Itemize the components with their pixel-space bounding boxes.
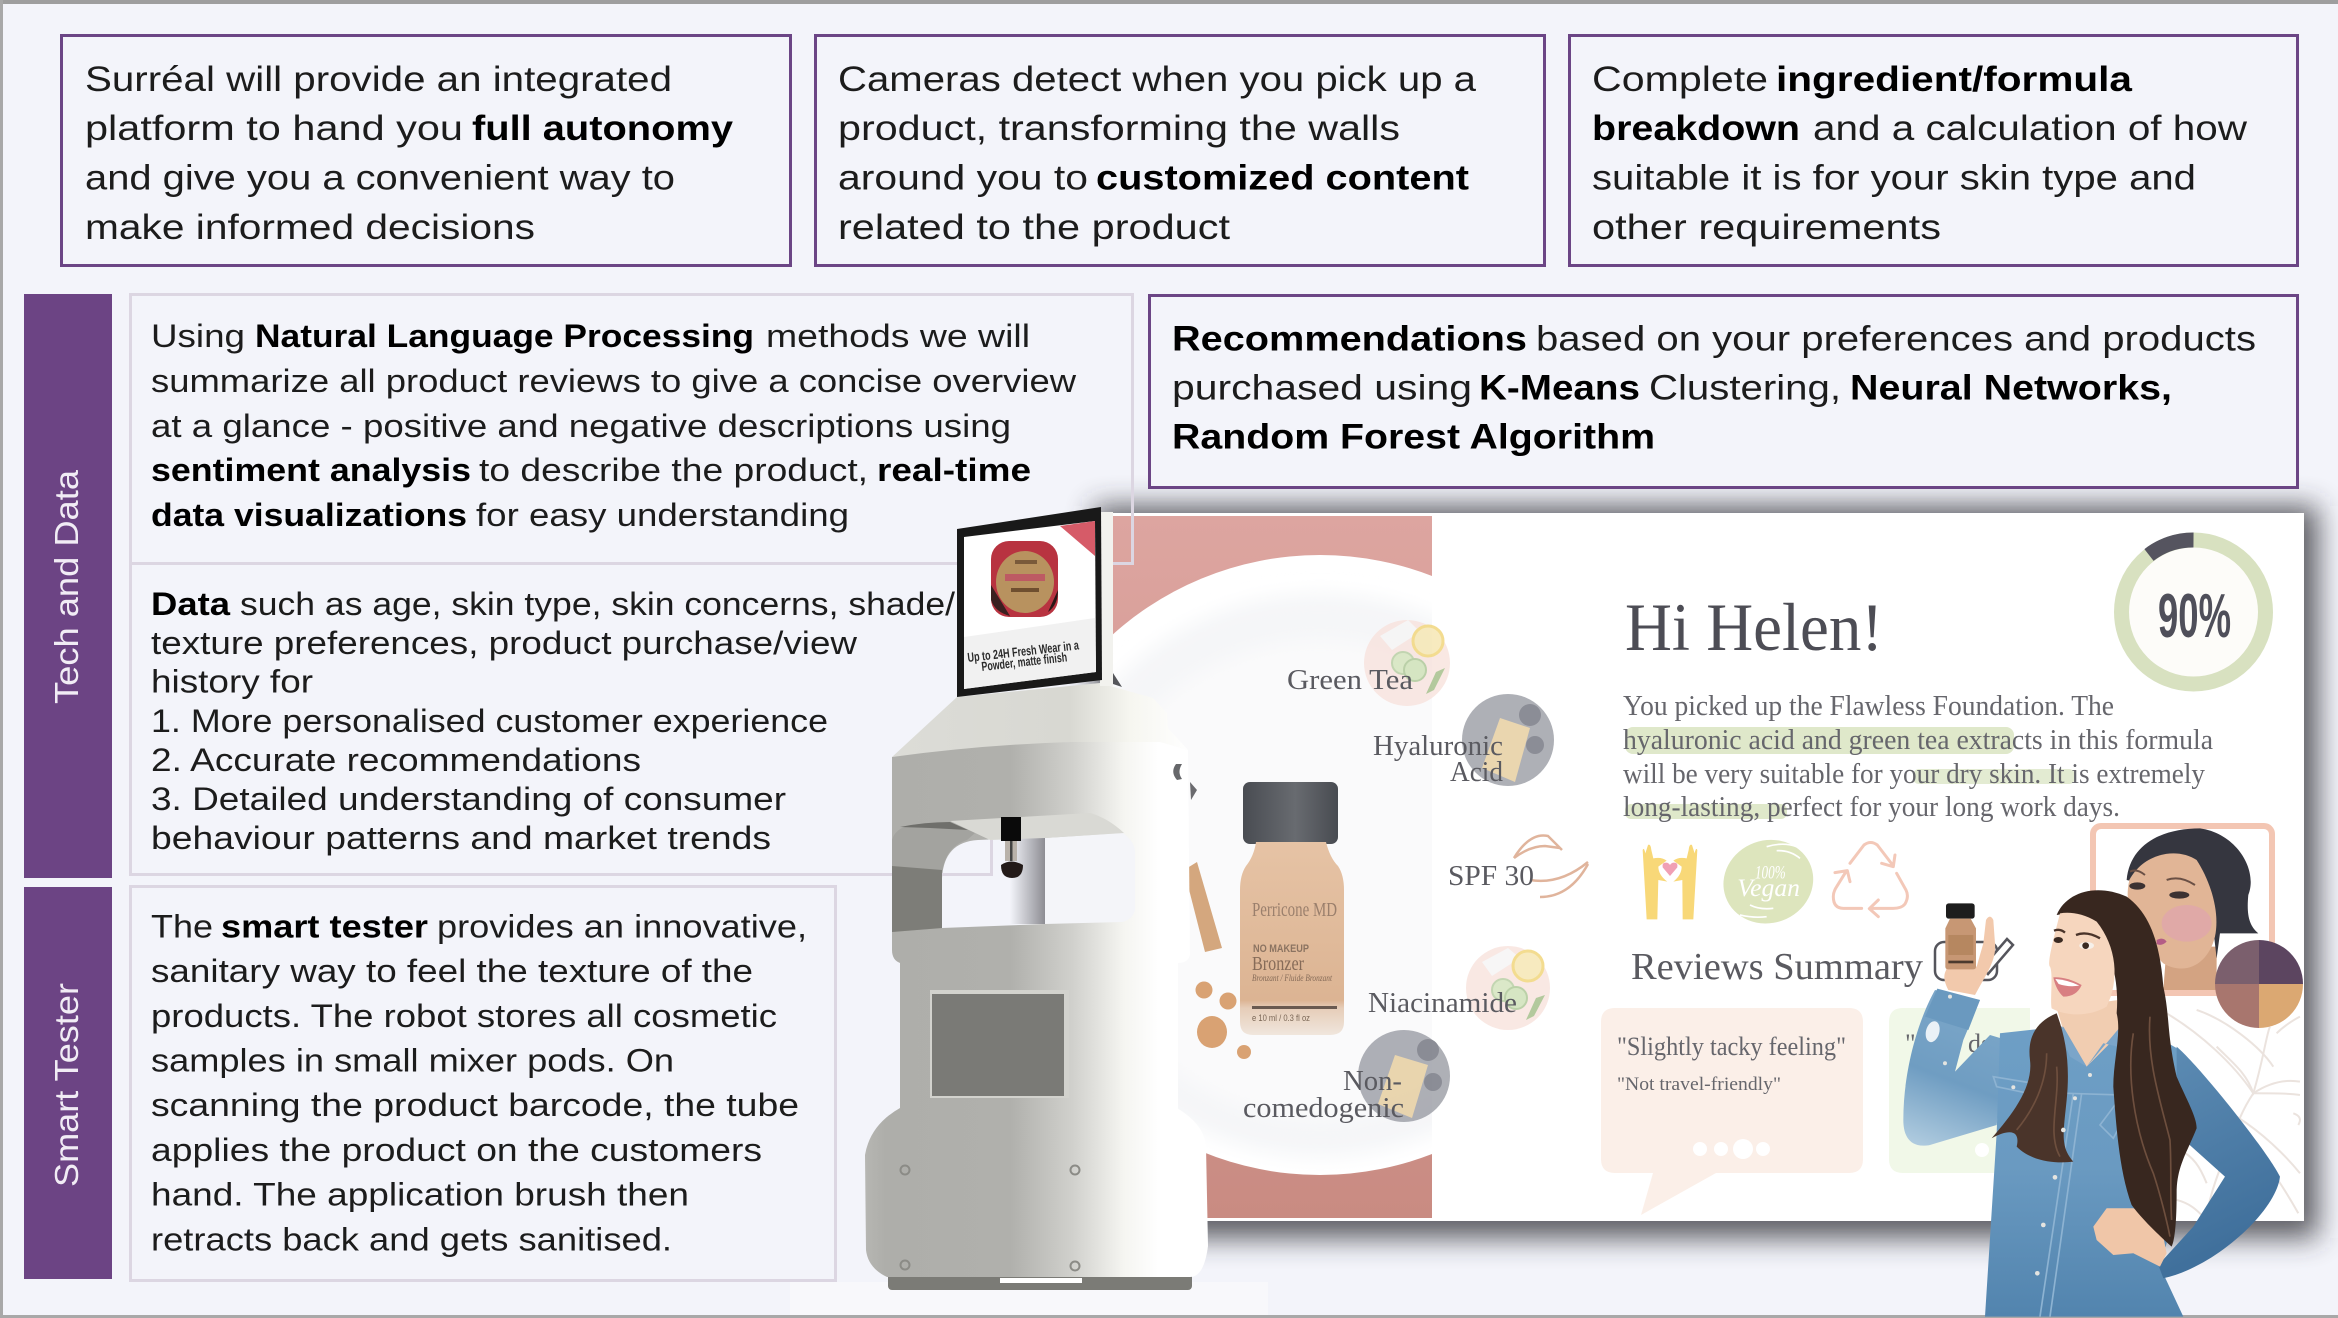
hair main mass: [2057, 890, 2197, 1247]
icon: foundation bottle: Perricone MD: [1252, 899, 1337, 921]
icon: recycle: [1833, 842, 1907, 917]
robot body: [900, 950, 1178, 1115]
hair highlights: [2017, 1017, 2172, 1237]
icon: 100% vegan badge: [1712, 827, 1825, 936]
chart: 90% match ring: [2122, 540, 2266, 684]
top card: ingredient breakdown: suitable it is for your skin type and: [1592, 158, 2196, 198]
face: [2049, 913, 2115, 1014]
review card: tacky feeling: [1601, 1008, 1863, 1215]
right sleeve: [2158, 1047, 2280, 1278]
smart tester text box: hand. The application brush then: [151, 1176, 689, 1212]
top card: ingredient breakdown: and a calculation of how: [1813, 109, 2248, 148]
recommendations card: Clustering,: [1649, 368, 1841, 408]
icon: small foundation bottle: [1945, 903, 1976, 969]
collar: [2060, 1023, 2132, 1067]
icon: application brush: [1001, 817, 1023, 878]
top card: autonomy: Surréal will provide an integrated: [85, 60, 672, 99]
NLP text box: Using: [151, 318, 245, 354]
paragraph with highlights: hyaluronic acid and green tea extracts in this formula: [1623, 725, 2214, 756]
pink background with plate: [1113, 516, 1432, 1218]
ingredient: non-comedogenic: Non-: [1343, 1065, 1402, 1097]
smart tester text box: products. The robot stores all cosmetic: [151, 998, 777, 1034]
data text box: 1. More personalised customer experience: [151, 703, 828, 739]
neck: [2057, 1000, 2123, 1067]
smart tester robot: [790, 507, 1268, 1315]
recommendations card: purchased using: [1172, 368, 1472, 408]
review card: second, mostly hidden: ": [1905, 1029, 1916, 1058]
display screen: [957, 507, 1102, 697]
hand on waist: [2093, 1208, 2167, 1267]
ingredient: non-comedogenic: comedogenic: [1243, 1092, 1404, 1124]
screen bracket: [1100, 512, 1113, 686]
top card: cameras: [816, 36, 1544, 266]
icon: 100% vegan badge: Vegan: [1737, 874, 1800, 902]
recommendations card: [1150, 296, 2298, 488]
smart tester text box: provides an innovative,: [437, 908, 807, 944]
section tab: Smart Tester: Smart Tester: [48, 983, 85, 1187]
review card: second, mostly hidden: [1889, 1008, 2030, 1173]
paragraph with highlights: long-lasting, perfect for your long work days.: [1623, 792, 2120, 823]
recommendations card: based on your preferences and products: [1536, 320, 2256, 358]
icon: hands with heart: [1643, 845, 1697, 919]
facial features: [2053, 930, 2100, 997]
smart tester text box: scanning the product barcode, the tube: [151, 1087, 799, 1123]
product photo on screen: [991, 541, 1058, 617]
data text box: such as age, skin type, skin concerns, shade/: [240, 586, 955, 622]
smart tester text box: applies the product on the customers: [151, 1132, 762, 1168]
paragraph with highlights: [1623, 691, 2214, 823]
hair left strand: [1992, 1013, 2073, 1162]
top card: autonomy: and give you a convenient way to: [85, 158, 675, 198]
reviews heading: Reviews Summary: [1631, 946, 1923, 988]
top card: cameras: Cameras detect when you pick up a: [838, 60, 1477, 99]
ingredient: SPF 30: SPF 30: [1448, 860, 1534, 892]
smart tester text box: The: [151, 908, 213, 944]
raised arm sleeve: [1903, 990, 2007, 1146]
ingredient: non-comedogenic: [1243, 1030, 1450, 1124]
NLP text box: to describe the product,: [479, 452, 868, 488]
ingredient: hyaluronic acid: Acid: [1450, 756, 1503, 788]
woman holding the product: [1903, 890, 2280, 1317]
shirt buttons: [1943, 995, 2092, 1276]
smart tester text box: smart tester: [221, 908, 428, 944]
display screen: Powder, matte finish: [981, 649, 1068, 674]
icon: foundation bottle: NO MAKEUP: [1253, 943, 1309, 955]
ingredient: green tea: [1287, 620, 1450, 706]
review card: tacky feeling: "Slightly tacky feeling": [1617, 1032, 1846, 1061]
icon: foundation drops: [1196, 982, 1251, 1059]
data text box: 3. Detailed understanding of consumer: [151, 781, 786, 817]
review card: tacky feeling: "Not travel-friendly": [1617, 1074, 1781, 1095]
NLP text box: sentiment analysis: [151, 452, 471, 488]
ingredient: SPF 30: [1448, 835, 1588, 897]
NLP text box: summarize all product reviews to give a concise overview: [151, 363, 1077, 399]
recommendations card: K-Means: [1479, 368, 1640, 408]
smart tester text box: samples in small mixer pods. On: [151, 1042, 674, 1078]
ingredient: hyaluronic acid: Hyaluronic: [1373, 730, 1503, 762]
smart tester text box: retracts back and gets sanitised.: [151, 1222, 672, 1258]
data text box: history for: [151, 664, 313, 700]
shirt body: [1985, 1023, 2183, 1317]
data text box: [130, 564, 992, 874]
shirt cuff: [1925, 989, 1980, 1030]
smart tester text box: [130, 886, 836, 1280]
chart: 90% match ring: 90%: [2158, 582, 2231, 651]
smart tester text box: sanitary way to feel the texture of the: [151, 953, 753, 989]
icon: foundation bottle: e 10 ml / 0.3 fl oz: [1252, 1013, 1310, 1023]
icon: write review: [1935, 939, 2013, 980]
eyeshadow palette: [2215, 940, 2303, 1028]
NLP text box: real-time: [877, 452, 1031, 488]
decorative leaf line art: [2167, 1010, 2300, 1217]
ingredient: niacinamide: Niacinamide: [1368, 987, 1517, 1019]
raised hand: [1944, 917, 1995, 995]
recommendations card: Neural Networks,: [1850, 368, 2172, 408]
NLP text box: data visualizations: [151, 497, 467, 533]
data text box: 2. Accurate recommendations: [151, 742, 641, 778]
data text box: texture preferences, product purchase/view: [151, 625, 858, 661]
robot base: [865, 1108, 1208, 1277]
data text box: behaviour patterns and market trends: [151, 820, 771, 856]
robot camera: [1113, 673, 1197, 800]
icon: foundation bottle: Bronzant / Fluide Bronzant: [1252, 973, 1332, 983]
top card: autonomy: make informed decisions: [85, 208, 535, 247]
top card: autonomy: [62, 36, 790, 266]
dispensing opening: [892, 813, 1135, 932]
top card: cameras: customized content: [1096, 158, 1469, 198]
robot screws: [900, 1166, 1080, 1270]
top card: cameras: around you to: [838, 158, 1088, 198]
ingredient: niacinamide: [1368, 946, 1550, 1030]
top card: autonomy: platform to hand you: [85, 109, 463, 148]
top card: cameras: product, transforming the walls: [838, 109, 1400, 148]
section tab: Tech and Data: [24, 294, 112, 878]
icon: 100% vegan badge: 100%: [1755, 862, 1786, 883]
ingredient: green tea: Green Tea: [1287, 664, 1413, 696]
recommendations card: Recommendations: [1172, 320, 1527, 358]
icon: foundation bottle: [1184, 782, 1344, 1035]
NLP text box: [130, 294, 1132, 564]
NLP text box: Natural Language Processing: [255, 318, 754, 354]
NLP text box: for easy understanding: [476, 497, 849, 533]
paragraph with highlights: will be very suitable for your dry skin. It is extremely: [1623, 759, 2205, 790]
robot front panel: [930, 990, 1069, 1098]
robot head: [892, 683, 1188, 757]
slide mock-up panel: personalised product screen: [1010, 506, 2318, 1238]
ingredient: hyaluronic acid: [1373, 694, 1554, 788]
recommendations card: Random Forest Algorithm: [1172, 418, 1655, 456]
robot feet: [888, 1272, 1192, 1290]
top card: ingredient breakdown: Complete: [1592, 60, 1768, 99]
top card: cameras: related to the product: [838, 208, 1230, 247]
top card: autonomy: full autonomy: [472, 109, 734, 148]
portrait with shade frame: [2093, 826, 2272, 993]
greeting heading: Hi Helen!: [1625, 589, 1883, 665]
top card: ingredient breakdown: [1570, 36, 2298, 266]
paragraph with highlights: You picked up the Flawless Foundation. The: [1623, 691, 2114, 722]
display screen: Up to 24H Fresh Wear in a: [967, 637, 1080, 665]
top card: ingredient breakdown: ingredient/formula: [1776, 60, 2133, 99]
top card: ingredient breakdown: other requirements: [1592, 208, 1941, 247]
data text box: Data: [151, 586, 230, 622]
NLP text box: methods we will: [766, 318, 1030, 354]
review card: second, mostly hidden: ds: [1968, 1029, 1991, 1058]
top card: ingredient breakdown: breakdown: [1592, 109, 1800, 148]
section tab: Smart Tester: [24, 887, 112, 1279]
reviews heading: [1631, 939, 2013, 988]
robot band and lower ring: [892, 742, 1190, 963]
icon: foundation bottle: Bronzer: [1252, 953, 1304, 975]
cuff opening: [1923, 1020, 1942, 1044]
shirt seams and pockets: [1993, 1077, 2123, 1317]
NLP text box: at a glance - positive and negative descriptions using: [151, 408, 1011, 444]
section tab: Tech and Data: Tech and Data: [48, 469, 85, 704]
